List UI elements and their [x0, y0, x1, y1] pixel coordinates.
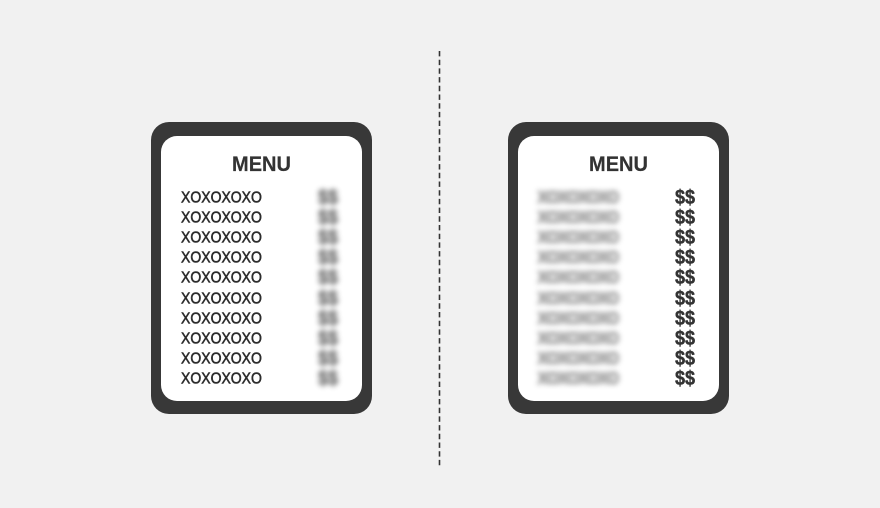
text block: blurred item names: XOXOXOXO: [538, 188, 619, 206]
text block: sharp prices: [675, 186, 695, 389]
heading: right menu title: MENU: [589, 154, 648, 176]
panel: left menu: [151, 122, 372, 414]
text block: sharp item names: [180, 188, 262, 387]
text block: blurred item names: XOXOXOXO: [538, 248, 619, 266]
text block: sharp item names: XOXOXOXO: [181, 289, 262, 307]
text block: blurred item names: XOXOXOXO: [538, 309, 619, 327]
text block: blurred item names: XOXOXOXO: [538, 289, 619, 307]
text block: sharp item names: XOXOXOXO: [181, 248, 262, 266]
text block: sharp prices: $$: [675, 327, 695, 349]
text block: sharp prices: $$: [675, 246, 695, 268]
text block: sharp prices: $$: [675, 367, 695, 389]
menu sheet: right: [518, 136, 719, 401]
heading: left menu title: MENU: [232, 154, 291, 176]
text block: blurred prices: $$: [318, 266, 338, 288]
menu sheet: left: [161, 136, 362, 401]
text block: blurred prices: [315, 186, 342, 389]
text block: sharp prices: $$: [675, 226, 695, 248]
text block: blurred prices: $$: [318, 206, 338, 228]
text block: sharp item names: XOXOXOXO: [181, 228, 262, 246]
text block: blurred prices: $$: [318, 327, 338, 349]
text block: blurred item names: XOXOXOXO: [538, 208, 619, 226]
text block: blurred item names: XOXOXOXO: [538, 349, 619, 367]
text block: sharp item names: XOXOXOXO: [181, 329, 262, 347]
text block: sharp prices: $$: [675, 266, 695, 288]
text block: sharp item names: XOXOXOXO: [181, 349, 262, 367]
text block: sharp item names: XOXOXOXO: [181, 208, 262, 226]
text block: sharp item names: XOXOXOXO: [181, 268, 262, 286]
text block: sharp prices: $$: [675, 206, 695, 228]
divider: dashed line: [438, 51, 440, 466]
text block: blurred item names: XOXOXOXO: [538, 369, 619, 387]
text block: blurred prices: $$: [318, 367, 338, 389]
text block: sharp item names: XOXOXOXO: [181, 309, 262, 327]
text block: sharp prices: $$: [675, 347, 695, 369]
text block: blurred prices: $$: [318, 246, 338, 268]
text block: blurred item names: [535, 188, 622, 388]
text block: blurred prices: $$: [318, 186, 338, 208]
text block: sharp prices: $$: [675, 186, 695, 208]
text block: sharp prices: $$: [675, 287, 695, 309]
text block: blurred prices: $$: [318, 287, 338, 309]
text block: sharp item names: XOXOXOXO: [181, 369, 262, 387]
panel: right menu: [508, 122, 729, 414]
text block: blurred prices: $$: [318, 307, 338, 329]
text block: sharp item names: XOXOXOXO: [181, 188, 262, 206]
text block: sharp prices: $$: [675, 307, 695, 329]
text block: blurred item names: XOXOXOXO: [538, 268, 619, 286]
text block: blurred prices: $$: [318, 226, 338, 248]
text block: blurred item names: XOXOXOXO: [538, 228, 619, 246]
text block: blurred prices: $$: [318, 347, 338, 369]
text block: blurred item names: XOXOXOXO: [538, 329, 619, 347]
